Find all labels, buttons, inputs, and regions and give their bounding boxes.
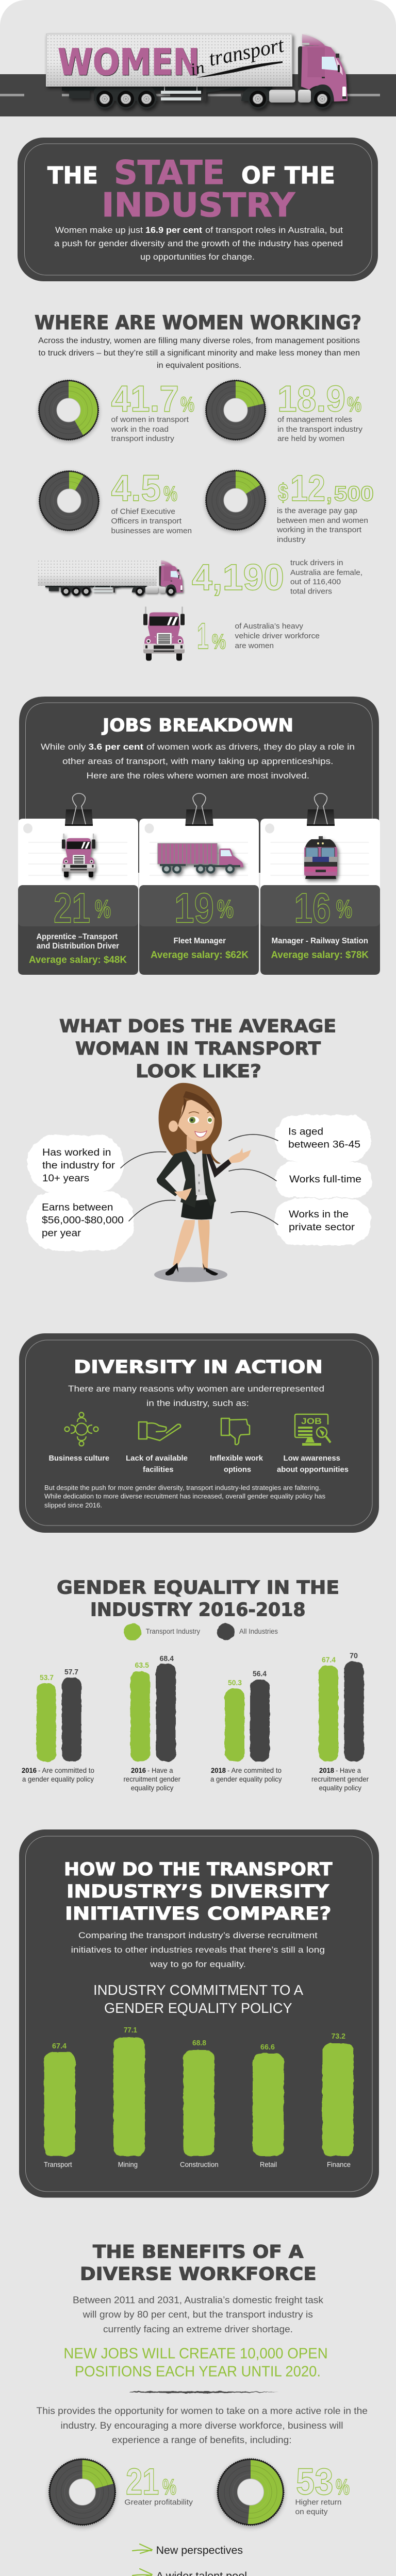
panel: state of the industry: [18, 138, 378, 281]
reason: inflexible work: options: [224, 1466, 251, 1474]
reason: business culture: [48, 1413, 109, 1463]
chart: 2018 recruitment gender equality policy: recruitment gender: [311, 1775, 369, 1783]
text: domestic freight: currently facing an extreme driver shortage.: [103, 2324, 293, 2334]
icon: front truck: [62, 834, 95, 877]
chart: 2016 recruitment gender equality policy: [124, 1655, 180, 1792]
panel: how do diversity initiatives compare: [19, 1829, 379, 2198]
heading: what does the average woman look like: [59, 1016, 336, 1082]
chart: 2018 committed to gender equality policy: 50.3: [228, 1679, 242, 1687]
stat: 41.7% road transport: of women in transport: [111, 416, 189, 424]
benefit: wider talent pool: [133, 2569, 247, 2576]
stat: 53% higher return on equity: [217, 2459, 350, 2528]
heading: how do initiatives compare: INDUSTRY’S DIVERSITY: [67, 1882, 329, 1902]
bar: finance: [322, 2032, 354, 2168]
stat: 53% higher return on equity: 53: [296, 2462, 333, 2503]
chart: 2016 recruitment gender equality policy: 63.5: [135, 1662, 149, 1670]
title: women in transport: in: [189, 58, 206, 79]
text: despite the push: While dedication to more diverse recruitment has increased, overall gender equality policy has: [44, 1493, 325, 1500]
stat: 53% higher return on equity: on equity: [295, 2507, 328, 2516]
bubble: has worked: the industry for: [42, 1160, 116, 1171]
chart: 2018 committed to gender equality policy: 56.4: [253, 1670, 267, 1678]
bar: construction: [180, 2039, 219, 2168]
heading: how do initiatives compare: [64, 1859, 333, 1924]
stat: 4,190 truck drivers: total drivers: [290, 587, 332, 596]
stat: 4.5% CEOs: %: [163, 482, 177, 505]
tire chart: [217, 2459, 284, 2528]
chart: 2018 recruitment gender equality policy: 70: [350, 1652, 358, 1660]
heading: gender equality: INDUSTRY 2016-2018: [90, 1600, 305, 1621]
stat: 53% higher return on equity: Higher return: [295, 2498, 341, 2507]
text: despite the push: [44, 1484, 325, 1509]
reason: inflexible work: [210, 1418, 263, 1474]
stat: $12,500 pay gap: is the average pay gap: [277, 507, 357, 515]
card: apprentice 21%: and Distribution Driver: [37, 942, 119, 951]
heading: the state of the industry: INDUSTRY: [102, 187, 295, 225]
intro: diversity: [68, 1384, 324, 1408]
bubble: has worked: Has worked in: [42, 1147, 111, 1158]
heading: the state of the industry: OF THE: [241, 162, 335, 189]
card: railway station manager 16%: 16: [294, 885, 331, 931]
icon: binder clip: [307, 793, 335, 826]
icon: thumbs down: [221, 1418, 250, 1445]
card: apprentice 21%: Average salary: $48K: [29, 955, 127, 965]
stat: 18.9% management: %: [347, 393, 361, 416]
stat: 1% heavy vehicle drivers: [143, 607, 320, 660]
card: railway station manager 16%: %: [336, 895, 352, 923]
stat: 4,190 truck drivers: out of 116,400: [290, 578, 341, 586]
bubble: works full-time: Works full-time: [289, 1174, 361, 1185]
icon: binder clip: [186, 793, 213, 826]
text: opportunity: This provides the opportunity for women to take on a more active role in the: [36, 2406, 368, 2416]
stat: 4,190 truck drivers: truck drivers in: [290, 559, 343, 567]
stat: 4.5% CEOs: [39, 468, 192, 535]
heading: what does the average woman look like: WOMAN IN TRANSPORT: [75, 1039, 321, 1059]
stat: 4.5% CEOs: Officers in transport: [111, 517, 182, 526]
chart: 2018 committed to gender equality policy: a gender equality policy: [210, 1775, 282, 1783]
chart: 2016 recruitment gender equality policy: - Have a: [147, 1766, 173, 1774]
stat: 21% greater profitability: 21: [126, 2462, 159, 2503]
intro text: up opportunities for change.: [140, 252, 255, 262]
bar: finance: 73.2: [331, 2032, 345, 2041]
heading: benefits of a diverse workforce: [80, 2242, 317, 2284]
heading: where are women working: WHERE ARE WOMEN WORKING?: [35, 312, 361, 334]
stat: 18.9% management: in the transport industry: [277, 426, 363, 434]
reason: low awareness: Low awareness: [284, 1454, 340, 1463]
callout: new jobs: NEW JOBS WILL CREATE 10,000 OPEN: [63, 2346, 328, 2362]
bar: mining: [113, 2026, 145, 2168]
arrow: [133, 2544, 152, 2553]
chart: 2018 recruitment gender equality policy: [311, 1652, 369, 1792]
stat: $12,500 pay gap: 12: [290, 468, 325, 509]
panel: diversity in action: [19, 1333, 379, 1533]
heading: benefits of a diverse workforce: THE BENEFITS OF A: [93, 2242, 304, 2263]
intro: where are women working: [38, 336, 360, 370]
chart: 2016 committed to gender equality policy: [22, 1668, 94, 1783]
text: opportunity: [36, 2406, 368, 2445]
bar: retail: 66.6: [260, 2043, 275, 2052]
stat: 41.7% road transport: %: [180, 393, 194, 416]
stat: 41.7% road transport: 41.7: [111, 379, 179, 419]
reason: lack of facilities: Lack of available: [126, 1454, 188, 1463]
trailer: [46, 34, 292, 86]
reason: lack of facilities: [126, 1422, 188, 1474]
legend: Transport Industry: [146, 1628, 200, 1635]
chart: 2016 committed to gender equality policy: - Are committed to: [38, 1766, 94, 1774]
intro: compare: [71, 1931, 325, 1969]
heading: how do initiatives compare: HOW DO THE TRANSPORT: [64, 1859, 333, 1880]
text: domestic freight: [73, 2295, 324, 2334]
heading: diversity in action: DIVERSITY IN ACTION: [74, 1357, 323, 1378]
intro: jobs breakdown: other areas of transport, with many taking up apprenticeships.: [62, 757, 333, 766]
callout: new jobs: [63, 2346, 328, 2380]
heading: jobs breakdown: JOBS BREAKDOWN: [102, 715, 293, 736]
stat: 1% heavy vehicle drivers: of Australia’s heavy: [235, 622, 304, 631]
stat: 21% greater profitability: Greater profitability: [124, 2498, 193, 2507]
title: women in transport: transport: [207, 32, 287, 71]
bar: transport: Transport: [44, 2160, 72, 2168]
header truck with title: [46, 32, 348, 109]
intro: compare: way to go for equality.: [150, 1960, 246, 1969]
icon: people around table: [65, 1413, 98, 1446]
chart: 2016 committed to gender equality policy: 53.7: [40, 1674, 54, 1682]
stat: 41.7% road transport: work in the road: [110, 426, 169, 434]
bar: retail: Retail: [260, 2160, 277, 2168]
card: railway station manager 16%: Average salary: $78K: [271, 950, 369, 960]
stat: 4,190 truck drivers: [38, 557, 362, 598]
stat: 18.9% management: are held by women: [277, 435, 344, 443]
bar: retail: [253, 2043, 284, 2168]
stat: 4.5% CEOs: businesses are women: [111, 527, 192, 535]
heading: the state of the industry: STATE: [114, 154, 225, 192]
bubble: works in private sector: [274, 1198, 371, 1245]
tire chart: [38, 380, 99, 442]
reason: lack of facilities: facilities: [143, 1466, 173, 1474]
card: fleet manager 19%: Average salary: $62K: [151, 950, 249, 960]
stat: 4.5% CEOs: 4.5: [111, 468, 161, 509]
benefit: new perspectives: New perspectives: [156, 2545, 243, 2556]
stat: 21% greater profitability: [48, 2459, 193, 2528]
chart: 2018 recruitment gender equality policy: - Have a: [336, 1766, 361, 1774]
chart title: INDUSTRY COMMITMENT TO A: [93, 1982, 303, 1998]
text: domestic freight: Between 2011 and 2031, Australia’s domestic freight task: [73, 2295, 324, 2305]
stat: $12,500 pay gap: $: [278, 479, 288, 506]
intro: diversity: There are many reasons why women are underrepresented: [68, 1384, 324, 1394]
icon: binder clip: [65, 793, 93, 826]
connector lines: [121, 1134, 278, 1225]
intro text: a push for gender diversity and the growth of the industry has opened: [54, 239, 343, 248]
stat: $12,500 pay gap: ,: [326, 483, 332, 505]
tire chart: [48, 2459, 116, 2528]
heading: how do initiatives compare: INITIATIVES COMPARE?: [65, 1904, 331, 1924]
heading: what does the average woman look like: LOOK LIKE?: [136, 1061, 261, 1082]
stat: $12,500 pay gap: between men and women: [277, 517, 368, 525]
heading: what does the average woman look like: WHAT DOES THE AVERAGE: [59, 1016, 336, 1037]
chart: 2018 recruitment gender equality policy: 2018: [319, 1766, 334, 1774]
bar: transport: 67.4: [52, 2042, 67, 2050]
bubble: earns: Earns between: [42, 1202, 113, 1213]
stat: $12,500 pay gap: [205, 468, 374, 544]
reason: low awareness: about opportunities: [277, 1466, 349, 1474]
card: railway station manager 16%: [260, 793, 380, 975]
bubble: earns: per year: [42, 1228, 81, 1239]
intro text: 16.9 per cent: [145, 226, 203, 235]
intro: jobs breakdown: While only: [41, 742, 86, 752]
intro: where are women working: to truck drivers – but they’re still a significant minority and make less money than men: [38, 349, 360, 358]
reason: business culture: Business culture: [48, 1454, 109, 1463]
text: opportunity: industry. By encouraging a more diverse workforce, business will: [61, 2420, 343, 2431]
card: apprentice 21%: %: [95, 895, 111, 923]
reason: low awareness: [277, 1414, 349, 1474]
text: despite the push: But despite the push for more gender diversity, transport industry-led strategies are faltering.: [44, 1484, 321, 1492]
icon: container truck: [158, 843, 243, 874]
icon: front truck: [143, 607, 185, 660]
bubble: works in private sector: private sector: [289, 1222, 355, 1233]
bar: mining: Mining: [118, 2160, 138, 2168]
intro text: Women make up just: [55, 226, 143, 235]
heading: gender equality: [57, 1577, 339, 1621]
header road: [0, 74, 396, 116]
intro: where are women working: in equivalent positions.: [157, 361, 241, 370]
intro: compare: initiatives to other industries reveals that there’s still a long: [71, 1945, 325, 1955]
stat: 18.9% management: 18.9: [277, 379, 345, 419]
icon: side truck: [38, 560, 183, 596]
bubble: earns: $56,000-$80,000: [42, 1215, 124, 1226]
stat: 1% heavy vehicle drivers: are women: [235, 642, 274, 650]
card: railway station manager 16%: Manager - Railway Station: [271, 937, 368, 945]
chart: 2018 committed to gender equality policy: [210, 1670, 282, 1783]
woman illustration: [154, 1083, 251, 1282]
bar: mining: 77.1: [124, 2026, 137, 2035]
title: women in transport: [58, 32, 287, 83]
text: despite the push: slipped since 2016.: [44, 1502, 102, 1509]
tire chart: [205, 380, 266, 442]
tire chart: [39, 471, 100, 533]
stat: $12,500 pay gap: working in the transport: [276, 526, 361, 534]
reason: inflexible work: Inflexible work: [210, 1454, 263, 1463]
bubble: is aged: Is aged: [288, 1127, 323, 1138]
stat: 1% heavy vehicle drivers: %: [212, 630, 226, 653]
stat: 53% higher return on equity: %: [336, 2475, 350, 2500]
stat: 18.9% management: [205, 379, 363, 443]
chart: 2018 recruitment gender equality policy: 67.4: [322, 1656, 336, 1664]
chart: 2016 recruitment gender equality policy: recruitment gender: [124, 1775, 180, 1783]
chart: 2018 recruitment gender equality policy: equality policy: [319, 1784, 361, 1792]
bubble: is aged: between 36-45: [288, 1140, 360, 1150]
intro: jobs breakdown: 3.6 per cent: [89, 742, 144, 752]
arrow: [133, 2569, 152, 2576]
chart: 2016 committed to gender equality policy: a gender equality policy: [22, 1775, 94, 1783]
stat: 1% heavy vehicle drivers: vehicle driver workforce: [235, 632, 320, 640]
bar: construction: Construction: [180, 2160, 219, 2168]
card: fleet manager 19%: %: [217, 895, 234, 923]
chart: 2016 recruitment gender equality policy: equality policy: [131, 1784, 173, 1792]
chart: 2016 committed to gender equality policy: 2016: [22, 1766, 37, 1774]
heading: gender equality: GENDER EQUALITY IN THE: [57, 1577, 339, 1598]
stat: 4,190 truck drivers: Australia are female,: [290, 569, 362, 577]
tire chart: [205, 470, 266, 532]
stat: 4,190 truck drivers: 4,190: [192, 557, 284, 598]
bar: construction: 68.8: [192, 2039, 206, 2047]
stat: 4.5% CEOs: of Chief Executive: [111, 508, 175, 516]
intro: jobs breakdown: of women work as drivers, they do play a role in: [146, 742, 355, 752]
title: women in transport: WOMEN: [58, 41, 200, 83]
heading: the state of the industry: THE: [47, 162, 98, 189]
heading: benefits of a diverse workforce: DIVERSE WORKFORCE: [80, 2264, 317, 2284]
bar: finance: Finance: [327, 2160, 351, 2168]
bubble: earns: [27, 1191, 134, 1250]
bar chart: industry commitment: [44, 2026, 354, 2168]
card: fleet manager 19%: 19: [174, 885, 214, 931]
intro: diversity: in the industry, such as:: [146, 1399, 249, 1408]
stat: 41.7% road transport: transport industry: [111, 435, 175, 443]
bubble: has worked: [27, 1135, 124, 1192]
stat: 1% heavy vehicle drivers: 1: [197, 616, 208, 657]
card: apprentice 21%: Apprentice –Transport: [36, 933, 118, 941]
icon: train: [304, 836, 337, 879]
chart title: GENDER EQUALITY POLICY: [104, 2000, 292, 2016]
legend: All Industries: [239, 1628, 278, 1635]
chart: 2016 recruitment gender equality policy: 2016: [131, 1766, 146, 1774]
intro: jobs breakdown: Here are the roles where women are most involved.: [87, 771, 309, 781]
text: domestic freight: will grow by 80 per cent, but the transport industry is: [82, 2310, 313, 2320]
chart: 2018 committed to gender equality policy: - Are commited to: [227, 1766, 282, 1774]
intro: compare: Comparing the transport industry’s diverse recruitment: [78, 1931, 318, 1940]
icon: job search monitor: JOB: [301, 1416, 322, 1426]
card: apprentice 21%: [18, 793, 138, 975]
panel: jobs breakdown: [19, 697, 379, 873]
card: apprentice 21%: 21: [54, 885, 90, 931]
chart: 2016 committed to gender equality policy: 57.7: [64, 1668, 78, 1676]
chart title: [93, 1982, 303, 2016]
card: fleet manager 19%: Fleet Manager: [173, 937, 226, 945]
bubble: works full-time: [275, 1162, 372, 1197]
intro: jobs breakdown: [41, 742, 355, 781]
heading: the state of the industry: [47, 154, 335, 225]
card: fleet manager 19%: [139, 793, 259, 975]
callout: new jobs: POSITIONS EACH YEAR UNTIL 2020.: [75, 2364, 321, 2380]
intro text: [54, 226, 343, 262]
icon: open hand: [139, 1422, 180, 1440]
legend: [124, 1623, 278, 1640]
bubble: has worked: 10+ years: [42, 1173, 89, 1184]
bar: transport: [44, 2042, 75, 2168]
stat: 21% greater profitability: %: [162, 2475, 176, 2500]
stat: 18.9% management: of management roles: [277, 416, 352, 424]
chart: 2016 recruitment gender equality policy: 68.4: [160, 1655, 174, 1663]
stat: $12,500 pay gap: 500: [334, 482, 374, 505]
stat: $12,500 pay gap: industry: [277, 536, 306, 544]
intro text: of transport roles in Australia, but: [205, 226, 343, 235]
bubble: is aged: [275, 1115, 371, 1162]
bubble: works in private sector: Works in the: [289, 1209, 349, 1220]
text: opportunity: experience a range of benefits, including:: [112, 2435, 292, 2445]
stat: 41.7% road transport: [38, 379, 194, 443]
intro: where are women working: Across the industry, women are filling many diverse roles, from management positions: [38, 336, 360, 345]
chart: 2018 committed to gender equality policy: 2018: [211, 1766, 226, 1774]
